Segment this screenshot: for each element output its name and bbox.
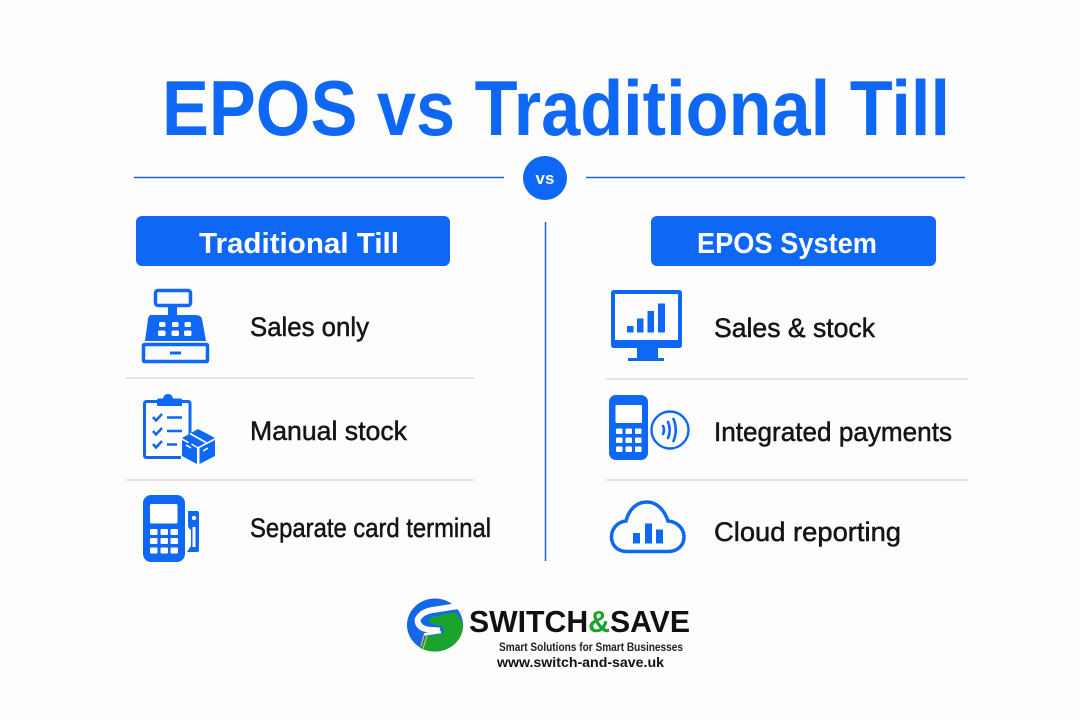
vs divider: vs xyxy=(536,169,554,188)
logo: switch and save xyxy=(407,598,690,670)
label: separate card terminal: Separate card terminal xyxy=(250,513,491,543)
icon: clipboard and box xyxy=(144,394,215,464)
title: EPOS vs Traditional Till xyxy=(162,64,950,152)
label: sales and stock: Sales & stock xyxy=(714,313,875,343)
icon: cloud with bar chart xyxy=(612,502,684,552)
heading: epos system: EPOS System xyxy=(697,228,877,260)
tagline: Smart Solutions for Smart Businesses xyxy=(499,640,683,654)
logo mark xyxy=(407,598,463,652)
label: manual stock: Manual stock xyxy=(250,416,407,446)
heading: traditional till: Traditional Till xyxy=(199,228,399,260)
icon: cash register xyxy=(144,290,208,362)
heading: epos system xyxy=(651,216,936,266)
website: www.switch-and-save.uk xyxy=(496,654,664,670)
vs divider xyxy=(134,156,965,200)
panel: epos system xyxy=(606,216,968,552)
label: sales only: Sales only xyxy=(250,312,369,342)
label: cloud reporting: Cloud reporting xyxy=(714,517,901,547)
icon: card terminal xyxy=(143,495,199,562)
icon: monitor with bar chart xyxy=(611,290,682,361)
label: integrated payments: Integrated payments xyxy=(714,417,952,447)
panel: traditional till xyxy=(126,216,491,562)
brand name: SWITCH&SAVE xyxy=(469,604,690,639)
icon: contactless terminal xyxy=(609,395,688,460)
heading: traditional till xyxy=(136,216,450,266)
